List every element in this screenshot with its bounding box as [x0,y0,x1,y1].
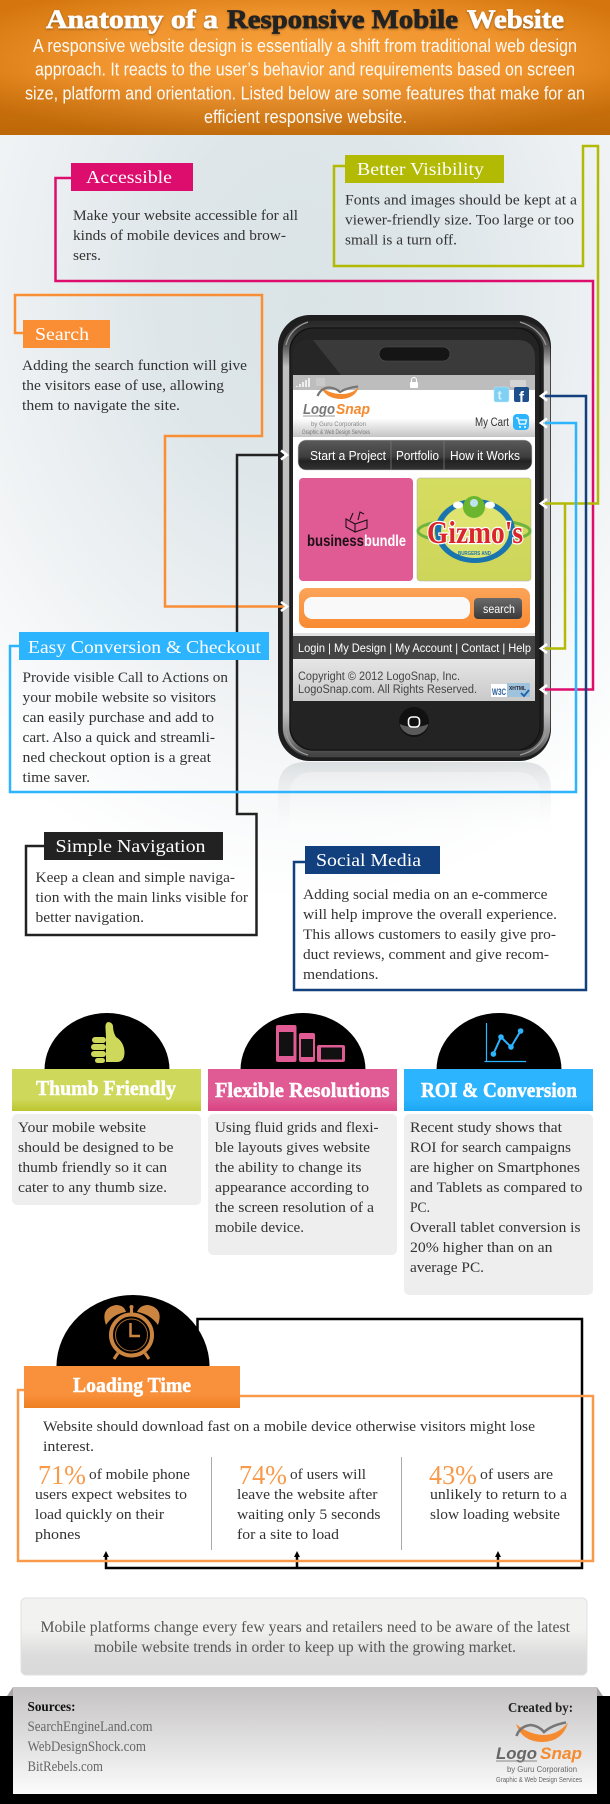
banner: flexible resolutions [208,1069,397,1111]
text: social media: mendations. [303,967,378,983]
label: accessible [71,163,193,191]
text: easy conversion: time saver. [22,770,90,786]
stat: 71 percent: of mobile phone [89,1467,190,1483]
panel: flexible resolutions text: the screen resolution of a [215,1200,374,1216]
frame: loading time [18,1390,593,1561]
panel: roi and conversion text: Overall tablet conversion is [410,1220,581,1236]
stat: 74 percent: for a site to load [237,1527,340,1543]
stat: 74 percent: waiting only 5 seconds [237,1507,381,1523]
text: loading intro: interest. [43,1439,94,1455]
callout: easy conversion and checkout: Easy Conversion & Checkout [28,637,261,657]
earpiece panel [293,340,535,375]
site navigation bar: Start a Project [310,448,386,463]
site footer menu: Login | My Design | My Account | Contact | Help [298,641,531,655]
panel: flexible resolutions text: ble layouts gives website [215,1140,370,1156]
feature: roi and conversion: ROI & Conversion [421,1078,577,1102]
text: search: Adding the search function will give [22,358,247,374]
phone mockup [278,315,551,761]
stat: 74 percent: leave the website after [237,1487,378,1503]
label: search [23,320,110,348]
icon: facebook: f [519,389,525,406]
text: better visibility: viewer-friendly size. Too large or too [345,212,574,228]
icon: alarm clock on black dome [56,1295,210,1367]
tile: business bundle: bundle [364,533,406,550]
text: better visibility: Fonts and images should be kept at a [345,192,577,208]
stat: 74 percent: 74% [239,1460,287,1490]
text: social media: will help improve the overall experience. [303,907,557,923]
icon: twitter: t [498,388,502,402]
title: Anatomy of a [46,5,218,34]
stat: 71 percent: users expect websites to [35,1487,187,1503]
sources: Sources: [28,1700,76,1715]
site header [293,390,535,437]
status bar [293,375,535,390]
glare triangle [293,340,341,375]
site copyright: Copyright © 2012 LogoSnap, Inc. [298,671,460,683]
callout: better visibility: Better Visibility [357,159,484,179]
banner: roi and conversion [404,1069,593,1111]
callout: social media [294,396,586,990]
panel: thumb friendly text: thumb friendly so it can [18,1160,168,1176]
panel: roi and conversion text: average PC. [410,1260,484,1276]
icon: twitter [494,387,509,402]
site copyright: XHTML [509,686,526,692]
tile: gizmo's [417,478,531,581]
logo: Logo [303,401,335,418]
phone chrome rim [286,324,547,754]
label: simple navigation [44,832,223,860]
callout: search [15,295,285,606]
text: social media: Adding social media on an e-commerce [303,887,548,903]
logo [302,386,370,436]
site copyright [293,659,535,701]
stat: 71 percent: load quickly on their [35,1507,164,1523]
title [46,5,564,34]
label: easy conversion [19,632,269,660]
tile: business bundle: business [307,533,364,550]
sources [28,1700,153,1775]
callout: better visibility [334,146,598,648]
sources: SearchEngineLand.com [28,1719,153,1735]
site copyright: LogoSnap.com. All Rights Reserved. [298,684,477,696]
text: search: the visitors ease of use, allowing [22,378,225,394]
tile: gizmo's: BURGERS AND [458,551,491,557]
arrowheads on the phone [281,392,547,694]
speaker [379,347,450,361]
text: accessible: sers. [73,248,101,264]
section: loading time [18,1295,593,1568]
logo: Graphic & Web Design Services [302,430,370,436]
phone corner highlights [286,322,546,755]
my cart: My Cart [475,417,510,429]
panel: thumb friendly text [12,1114,201,1205]
connector: better visibility [334,146,598,648]
panel: roi and conversion text: are higher on Smartphones [410,1160,580,1176]
connector: black line to stats [103,1319,582,1568]
connector: search [15,295,285,606]
panel: thumb friendly text: Your mobile website [18,1120,146,1136]
panel: flexible resolutions text [208,1114,397,1255]
text: easy conversion: cart. Also a quick and streamli- [22,730,215,746]
panel: flexible resolutions text: Using fluid grids and flexi- [215,1120,379,1136]
phone inner bezel [290,328,540,750]
created by: Graphic & Web Design Services [496,1775,582,1784]
created by: Snap [540,1744,582,1763]
text: easy conversion [22,670,228,786]
panel: roi and conversion text: PC. [410,1200,430,1216]
text: loading intro [43,1419,535,1455]
site search bar [299,588,530,628]
closing statement [21,1598,587,1675]
feature: thumb friendly [12,1013,201,1205]
sources: BitRebels.com [28,1759,104,1775]
stat: 43 percent: slow loading website [430,1507,560,1523]
site search bar: search [483,602,515,616]
panel: flexible resolutions text: appearance according to [215,1180,369,1196]
callout: simple navigation [26,455,284,935]
stat: 43 percent [429,1460,567,1523]
feature: flexible resolutions: Flexible Resolutions [215,1078,390,1102]
text: better visibility [345,192,577,248]
feature: flexible resolutions [208,1013,397,1255]
sources: WebDesignShock.com [28,1739,147,1755]
text: accessible: kinds of mobile devices and brow- [73,228,286,244]
text: easy conversion: Provide visible Call to Actions on [22,670,228,686]
intro paragraph: efficient responsive website. [204,107,407,127]
text: simple navigation: Keep a clean and simple naviga- [36,870,235,886]
logo: Snap [336,401,370,418]
panel: flexible resolutions text: the ability to change its [215,1160,362,1176]
connector: easy conversion [10,423,576,792]
label: better visibility [345,155,504,183]
text: easy conversion: can easily purchase and add to [22,710,214,726]
panel: thumb friendly text: should be designed to be [18,1140,174,1156]
text: easy conversion: your mobile website so visitors [22,690,216,706]
icon: facebook [514,387,529,406]
icon: line chart on black dome [436,1013,562,1070]
text: simple navigation [36,870,248,926]
callout: accessible [56,163,593,690]
stat: 74 percent [237,1460,381,1543]
panel: roi and conversion text: Recent study shows that [410,1120,563,1136]
closing statement: mobile website trends in order to keep up with the growing market. [94,1639,516,1656]
text: better visibility: small is a turn off. [345,232,457,248]
icon: devices on black dome [240,1013,366,1070]
my cart [475,414,529,430]
text: simple navigation: tion with the main links visible for [36,890,248,906]
panel: flexible resolutions text: mobile device. [215,1220,304,1236]
callout: simple navigation: Simple Navigation [56,836,206,856]
footer fold corners [7,1687,603,1696]
header banner [0,0,610,135]
text: social media [303,887,557,983]
site navigation bar [298,440,532,470]
intro paragraph [25,36,585,127]
label: social media [305,846,440,874]
footer [0,1687,610,1804]
banner: thumb friendly [12,1069,201,1111]
footer panel [13,1687,597,1794]
connector: accessible [56,178,593,690]
icon: thumb on black dome [44,1013,170,1070]
text: accessible [73,208,298,264]
logo: by Guru Corporation [311,421,366,428]
panel: roi and conversion text: ROI for search campaigns [410,1140,571,1156]
tile: gizmo's: Gizmo's [427,514,523,550]
site navigation bar: How it Works [450,448,520,463]
site copyright: W3C [492,687,506,697]
banner: loading time [24,1366,240,1408]
footer black base [0,1696,610,1804]
text: search: them to navigate the site. [22,398,180,414]
text: easy conversion: ned checkout option is a great [22,750,212,766]
closing statement: Mobile platforms change every few years and retailers need to be aware of the latest [40,1619,571,1636]
panel: roi and conversion text: and Tablets as compared to [410,1180,582,1196]
feature: thumb friendly: Thumb Friendly [36,1076,176,1100]
callout: search: Search [35,324,89,344]
site footer menu [293,633,535,659]
text: social media: duct reviews, comment and give recom- [303,947,549,963]
phone body [278,315,551,761]
created by: by Guru Corporation [507,1764,577,1774]
stat: 71 percent [35,1460,190,1543]
title: Responsive Mobile [227,5,458,34]
connector: social media [294,396,586,990]
upper background glow [0,135,610,1035]
created by [496,1701,582,1784]
stat: 74 percent: of users will [290,1467,366,1483]
callout: social media: Social Media [316,850,421,870]
tile: business bundle [299,478,413,581]
stat: 71 percent: 71% [38,1460,86,1490]
section: loading time: Loading Time [73,1373,191,1397]
callout: easy conversion and checkout [10,423,576,792]
feature: roi and conversion [404,1013,593,1295]
callout: accessible: Accessible [86,167,172,187]
phone reflection [278,762,551,840]
text: loading intro: Website should download fast on a mobile device otherwise visitors might lose [43,1419,535,1435]
stat: 43 percent: of users are [480,1467,553,1483]
panel: roi and conversion text: 20% higher than on an [410,1240,553,1256]
stat: 71 percent: phones [35,1527,81,1543]
text: social media: This allows customers to easily give pro- [303,927,556,943]
created by: Logo [496,1744,537,1763]
text: search [22,358,247,414]
screen content [293,390,535,633]
text: simple navigation: better navigation. [36,910,144,926]
panel: thumb friendly text: cater to any thumb size. [18,1180,167,1196]
title: Website [467,5,564,34]
stat: 43 percent: unlikely to return to a [430,1487,567,1503]
connector: simple navigation [26,455,284,935]
stat: 43 percent: 43% [429,1460,477,1490]
panel: roi and conversion text [404,1114,593,1295]
site navigation bar: Portfolio [396,448,439,463]
text: accessible: Make your website accessible for all [73,208,298,224]
home button [399,707,429,737]
created by: Created by: [508,1701,573,1716]
